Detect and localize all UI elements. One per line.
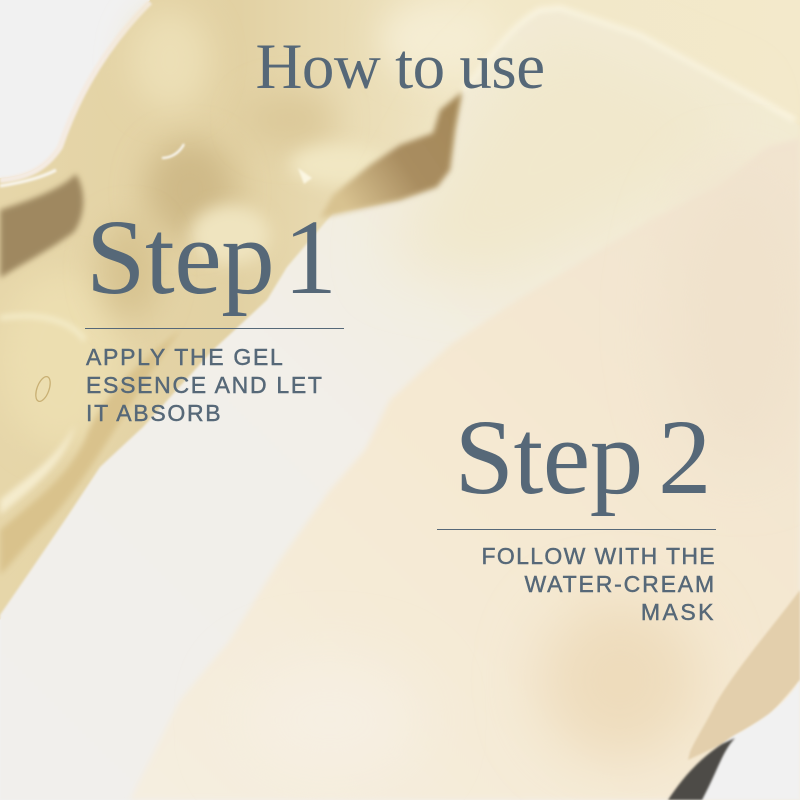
text: step 1 instructions: ESSENCE AND LET	[86, 372, 324, 398]
beige tonal variation	[240, 170, 800, 780]
gel band	[0, 0, 800, 620]
text: step 1 instructions: APPLY THE GEL	[86, 344, 285, 370]
gel lower fold	[0, 330, 180, 575]
text: step 2 instructions: FOLLOW WITH THE	[482, 543, 716, 569]
cream rim highlight	[463, 8, 795, 120]
bottom right white corner	[672, 680, 800, 800]
panel: step 2	[437, 399, 716, 625]
heading: step 2: Step 2	[455, 399, 711, 517]
gel edge shadow	[320, 92, 462, 218]
dark bottom edge	[668, 738, 735, 800]
divider	[437, 529, 716, 530]
text: step 2 instructions	[482, 543, 716, 625]
dark gel patch	[0, 174, 83, 278]
bottom right cream lobe	[688, 590, 800, 760]
gel edge glow	[0, 2, 150, 180]
beige cream band	[130, 138, 800, 800]
yellow cream tone	[390, 30, 740, 280]
heading: step 1: Step 1	[86, 199, 336, 317]
divider	[85, 328, 344, 329]
gel glints	[0, 144, 312, 403]
text: step 1 instructions: IT ABSORB	[86, 400, 222, 426]
panel: step 1	[85, 199, 344, 426]
text: step 2 instructions: WATER-CREAM	[524, 571, 716, 597]
text: step 1 instructions	[86, 344, 324, 426]
text: step 2 instructions: MASK	[641, 599, 716, 625]
title: How to use	[255, 31, 545, 103]
gel tonal patches	[0, 0, 500, 450]
